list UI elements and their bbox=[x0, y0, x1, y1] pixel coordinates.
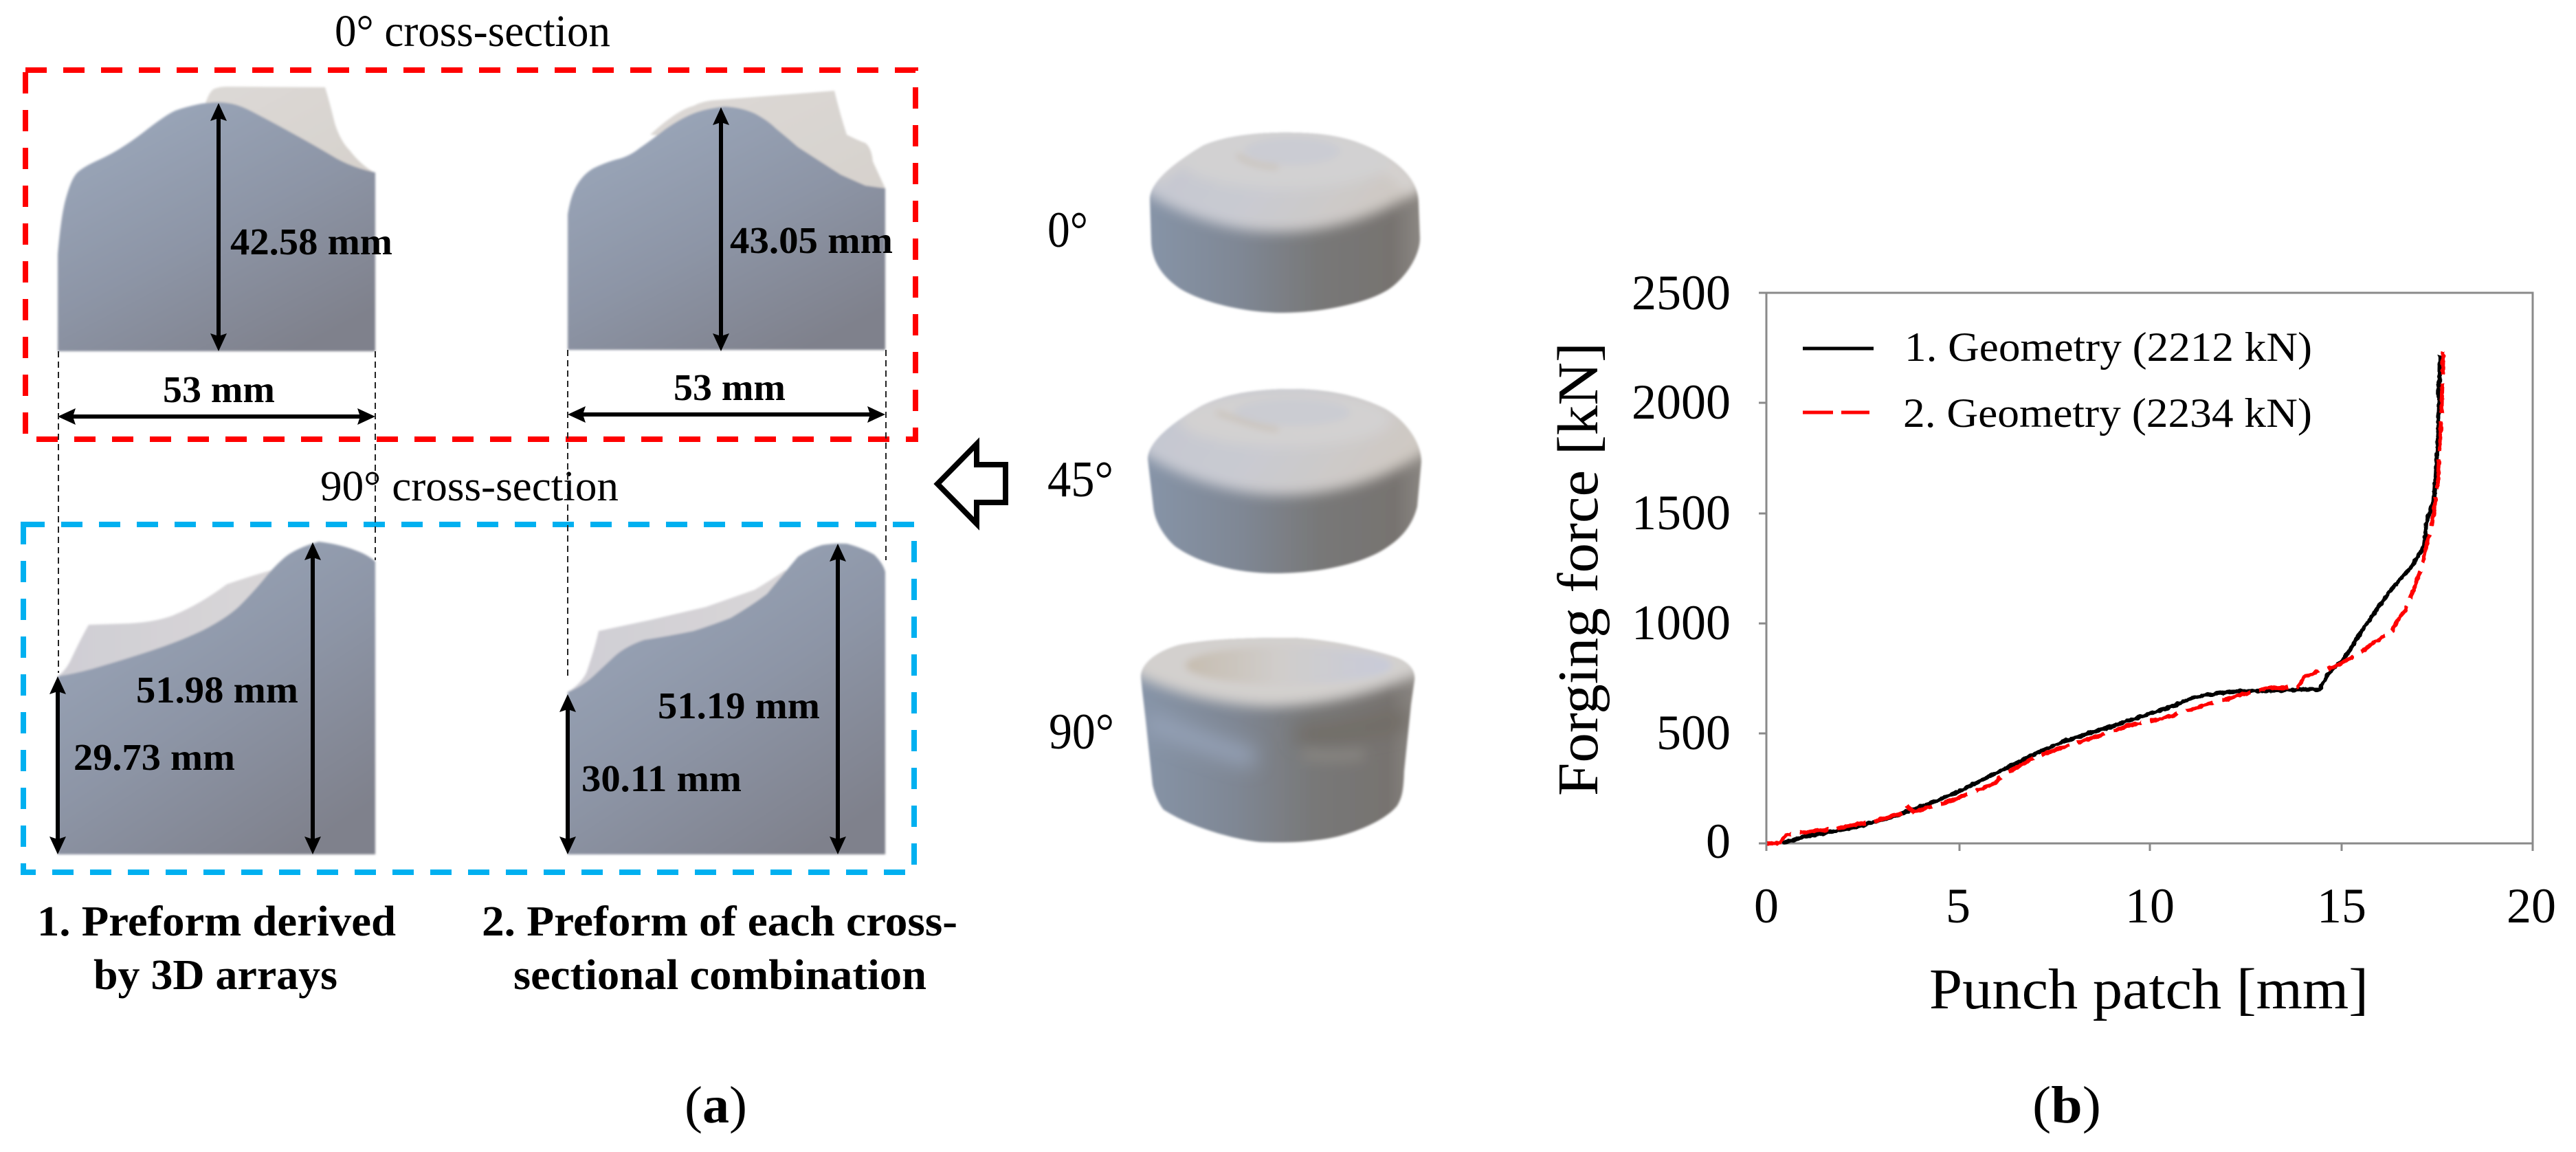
x axis tick labels: 10 bbox=[2125, 878, 2175, 933]
render: preform at 90 degrees bbox=[1140, 636, 1416, 844]
caption: preform 2: sectional combination bbox=[513, 952, 926, 999]
x axis tick labels bbox=[1754, 878, 2556, 933]
x axis tick labels: 0 bbox=[1754, 878, 1779, 933]
label: 0 degrees: 0° bbox=[1047, 202, 1088, 258]
arrow: 30.11 mm height bbox=[559, 694, 576, 854]
arrow: 51.98 mm height bbox=[304, 542, 321, 854]
y axis tick labels: 500 bbox=[1656, 705, 1731, 760]
arrow: 42.58 mm height bbox=[210, 103, 227, 351]
blue dashed frame: 90 degree group bbox=[23, 524, 914, 872]
caption: preform 1 bbox=[37, 898, 396, 999]
legend bbox=[1803, 324, 2312, 436]
label: 90 degrees: 90° bbox=[1049, 704, 1114, 760]
curve: geometry 1, black bbox=[1783, 355, 2440, 843]
label: 29.73 mm: 29.73 mm bbox=[74, 736, 235, 778]
plot frame and ticks bbox=[1759, 293, 2533, 851]
curve: geometry 2, red dashed bbox=[1766, 351, 2443, 843]
caption: preform 1: 1. Preform derived bbox=[37, 898, 396, 945]
label: 42.58 mm: 42.58 mm bbox=[230, 221, 392, 263]
render: preform at 0 degrees bbox=[1148, 131, 1421, 315]
heading: 0 degree cross-section: 0° cross-section bbox=[335, 6, 610, 56]
panel label (b): (b) bbox=[2032, 1076, 2101, 1134]
arrow: 51.19 mm height bbox=[830, 544, 846, 854]
y axis title: Forging force [kN] bbox=[1546, 342, 1610, 796]
panel (b): forging force chart bbox=[1546, 265, 2556, 1134]
arrow: 29.73 mm height bbox=[49, 676, 66, 854]
caption: preform 1: by 3D arrays bbox=[93, 952, 337, 999]
heading: 90 degree cross-section: 90° cross-section bbox=[320, 463, 619, 510]
thin dashed guide lines bbox=[58, 350, 886, 677]
panel label (a): (a) bbox=[685, 1076, 747, 1134]
label: 43.05 mm: 43.05 mm bbox=[730, 219, 893, 261]
red dashed frame: 0 degree group bbox=[25, 70, 915, 439]
label: 53 mm left: 53 mm bbox=[163, 368, 275, 410]
x axis title: Punch patch [mm] bbox=[1929, 957, 2368, 1021]
x axis tick labels: 15 bbox=[2317, 878, 2366, 933]
label: 51.19 mm: 51.19 mm bbox=[658, 685, 820, 727]
y axis tick labels: 1500 bbox=[1632, 485, 1731, 540]
arrow: hollow left arrow bbox=[937, 444, 1006, 524]
arrow: 53 mm width left bbox=[58, 408, 375, 425]
label: 30.11 mm: 30.11 mm bbox=[581, 757, 742, 799]
caption: preform 2: 2. Preform of each cross- bbox=[482, 898, 957, 945]
preform 1, 0 degree section bbox=[58, 87, 375, 351]
label: 53 mm right: 53 mm bbox=[674, 366, 786, 408]
arrow: 53 mm width right bbox=[568, 406, 885, 423]
y axis tick labels bbox=[1632, 265, 1731, 869]
label: 51.98 mm: 51.98 mm bbox=[136, 669, 298, 711]
preform 1, 90 degree section bbox=[58, 542, 375, 854]
label: 45 degrees: 45° bbox=[1047, 452, 1113, 508]
caption: preform 2 bbox=[482, 898, 957, 999]
x axis tick labels: 5 bbox=[1946, 878, 1970, 933]
legend: 1. Geometry (2212 kN) bbox=[1905, 324, 2312, 370]
y axis tick labels: 0 bbox=[1706, 814, 1731, 869]
y axis tick labels: 2000 bbox=[1632, 375, 1731, 430]
legend: 2. Geometry (2234 kN) bbox=[1903, 390, 2312, 436]
render: preform at 45 degrees bbox=[1146, 388, 1423, 575]
y axis tick labels: 2500 bbox=[1632, 265, 1731, 320]
preform 2, 90 degree section bbox=[568, 544, 885, 854]
panel (a): preform cross-sections bbox=[23, 6, 1433, 1134]
preform 2, 0 degree section bbox=[568, 91, 885, 350]
y axis tick labels: 1000 bbox=[1632, 595, 1731, 650]
arrow: 43.05 mm height bbox=[713, 107, 729, 351]
x axis tick labels: 20 bbox=[2507, 878, 2556, 933]
